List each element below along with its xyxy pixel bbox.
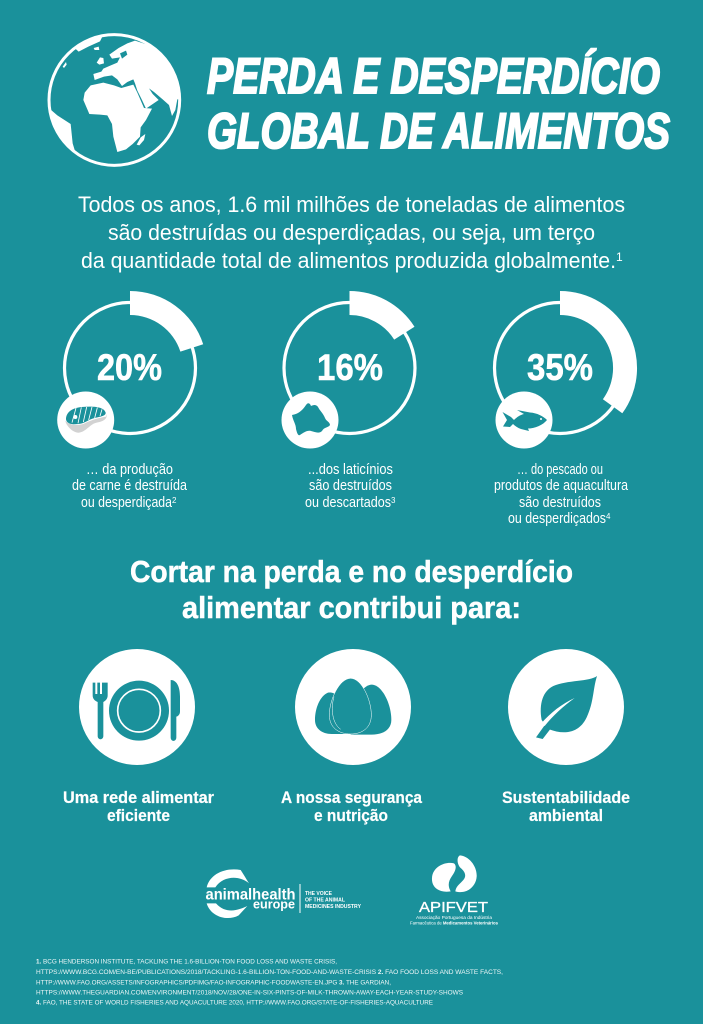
logo: animalhealth europe: OF THE ANIMAL [305, 898, 346, 904]
ring chart: 16% [284, 291, 415, 434]
caption: 2 [172, 496, 177, 505]
icon: cow hide [282, 392, 338, 448]
panel: food security and nutrition [281, 649, 422, 825]
logo: animalhealth europe [206, 869, 361, 918]
label: eficiente [107, 806, 170, 825]
heading: contributions [130, 554, 573, 625]
icon: leaf [508, 649, 624, 765]
icon: fish [496, 392, 552, 448]
caption: de carne é destruída [72, 478, 188, 494]
label [63, 788, 214, 825]
footnotes: 1. BCG HENDERSON INSTITUTE, TACKLING THE 1.6-BILLION-TON FOOD LOSS AND WASTE CRISIS, [36, 958, 337, 966]
panel: dairy statistic [282, 291, 415, 511]
footnotes: HTTPS://WWW.BCG.COM/EN-BE/PUBLICATIONS/2018/TACKLING-1.6-BILLION-TON-FOOD-AND-WASTE-CRISIS 2. FAO FOOD LOSS AND WASTE FACTS, [36, 969, 503, 976]
icon: meat [57, 392, 114, 448]
intro text: da quantidade total de alimentos produzida globalmente. [81, 248, 616, 273]
logo: APIFVET [410, 855, 499, 926]
icon: globe [47, 35, 183, 165]
label: Sustentabilidade [502, 788, 630, 807]
footnotes: HTTPS://WWW.THEGUARDIAN.COM/ENVIRONMENT/2018/NOV/28/ONE-IN-SIX-PINTS-OF-MILK-THROWN-AWAY-EACH-YEAR-STUDY-SHOWS [36, 990, 464, 996]
logo: animalhealth europe: europe [253, 896, 295, 912]
label: Uma rede alimentar [63, 788, 214, 807]
caption: ...dos laticínios [308, 462, 393, 478]
value: 35%: 35% [527, 347, 593, 388]
icon: eggs [295, 649, 411, 765]
caption: … do pescado ou [517, 462, 603, 478]
heading: contributions: alimentar contribui para: [182, 590, 521, 625]
panel: environmental sustainability [502, 649, 630, 825]
panel: efficient food network [63, 649, 214, 825]
icon: plate and cutlery [79, 649, 195, 765]
caption: são destruídos [309, 478, 392, 494]
caption: ou desperdiçados [508, 511, 606, 527]
logo: APIFVET: Farmacêutica de Medicamentos Veterinários [410, 920, 499, 926]
ring chart: 35% [494, 291, 637, 434]
caption [305, 462, 396, 511]
label: e nutrição [314, 806, 388, 825]
intro text: 1 [616, 250, 623, 264]
caption: 4 [606, 512, 611, 521]
title [207, 48, 670, 159]
intro text: Todos os anos, 1.6 mil milhões de toneladas de alimentos [78, 192, 625, 217]
caption [494, 462, 629, 527]
label: A nossa segurança [281, 788, 422, 807]
caption: ou desperdiçada [81, 495, 173, 511]
footnotes [36, 958, 503, 1006]
logo: animalhealth europe: THE VOICE [305, 891, 332, 897]
caption: … da produção [86, 462, 173, 478]
label: ambiental [529, 806, 603, 825]
caption: são destruídos [519, 495, 601, 511]
label [281, 788, 422, 825]
value: 20%: 20% [97, 347, 162, 388]
label [502, 788, 630, 825]
logo: animalhealth europe: MEDICINES INDUSTRY [305, 904, 361, 910]
intro text [78, 192, 625, 273]
value: 16%: 16% [317, 347, 383, 388]
panel: fish statistic [494, 291, 637, 527]
caption: ou descartados [305, 495, 391, 511]
logo: animalhealth europe: animalhealth [206, 886, 296, 904]
logo: APIFVET: APIFVET [419, 900, 488, 916]
heading: contributions: Cortar na perda e no desperdício [130, 554, 573, 589]
caption: produtos de aquacultura [494, 478, 629, 494]
intro text: são destruídas ou desperdiçadas, ou seja, um terço [108, 220, 595, 245]
logo: APIFVET: Associação Portuguesa da Indústria [416, 915, 493, 920]
ring chart: 20% [64, 291, 203, 434]
footnotes: 4. FAO, THE STATE OF WORLD FISHERIES AND AQUACULTURE 2020, HTTP://WWW.FAO.ORG/STATE-OF-FISHERIES-AQUACULTURE [36, 1000, 433, 1006]
footnotes: HTTP://WWW.FAO.ORG/ASSETS/INFOGRAPHICS/PDFIMG/FAO-INFOGRAPHIC-FOODWASTE-EN.JPG 3. THE GARDIAN, [36, 980, 391, 986]
caption [72, 462, 188, 511]
panel: meat statistic [57, 291, 203, 511]
caption: 3 [391, 496, 396, 505]
